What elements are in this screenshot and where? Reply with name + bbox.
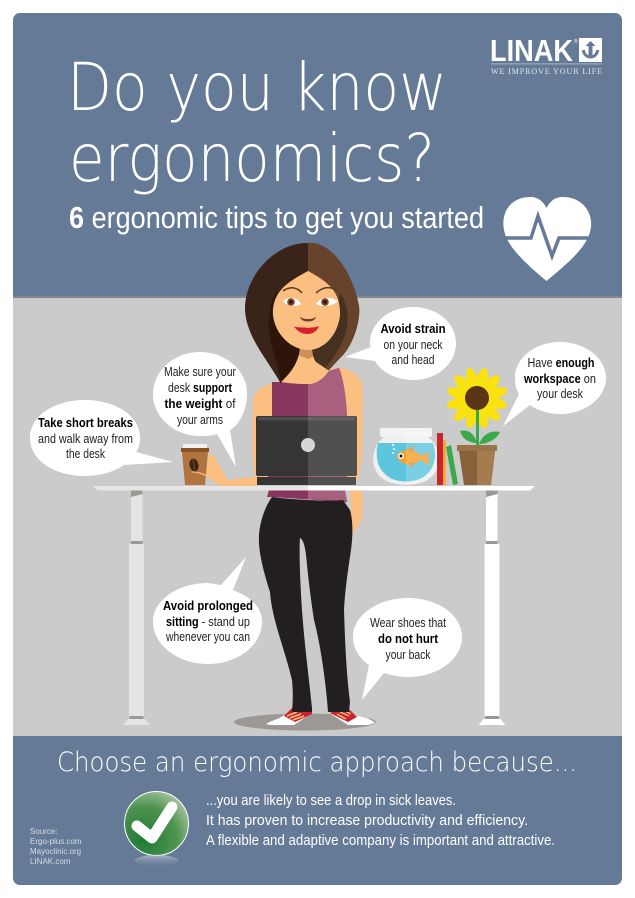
back arm (350, 490, 363, 535)
sunflower plant (446, 367, 508, 485)
logo: LINAK: WE IMPROVE YOUR LIFE (491, 67, 602, 76)
logo: LINAK: LINAK (490, 33, 574, 68)
speech bubble: support the weight: your arms (177, 413, 223, 427)
title: ergonomics? (69, 120, 435, 197)
nose (301, 318, 315, 321)
logo: LINAK (490, 33, 602, 76)
inner hair left (269, 290, 300, 382)
source list: Source: (30, 827, 58, 836)
arms and shoulders (252, 367, 363, 480)
speech bubble: avoid prolonged sitting (153, 557, 262, 664)
petals (446, 367, 508, 429)
speech bubble: shoes: Wear shoes that (370, 616, 446, 630)
speech bubble: enough workspace: workspace on (523, 372, 596, 386)
speech bubble: avoid prolonged sitting: sitting - stand up (166, 615, 250, 629)
source list: Ergo-plus.com (30, 837, 82, 846)
front arm and hand (193, 454, 257, 486)
hair back (245, 243, 359, 384)
speech bubble: shoes: your back (386, 648, 431, 662)
woman figure (193, 243, 376, 730)
face (273, 271, 340, 350)
logo: LINAK: ® (574, 38, 578, 45)
speech bubble: take short breaks: Take short breaks (38, 416, 133, 430)
speech bubble: support the weight: Make sure your (164, 365, 236, 379)
icon: green check (124, 792, 188, 868)
speech bubble: enough workspace (503, 342, 606, 426)
speech bubble: support the weight: desk support (168, 381, 233, 395)
reasons text: It has proven to increase productivity and efficiency. (206, 813, 528, 829)
eyes (283, 298, 338, 306)
speech bubble: avoid strain: on your neck (384, 338, 443, 352)
source list: Mayoclinic.org (30, 847, 81, 856)
speech bubble: avoid prolonged sitting: Avoid prolonged (163, 599, 253, 613)
speech bubble: enough workspace: Have enough (528, 356, 594, 370)
speech bubble: shoes (353, 598, 462, 700)
tank top (268, 368, 347, 480)
speech bubble: support the weight (153, 352, 247, 467)
reasons text (206, 793, 555, 849)
speech bubble: avoid strain (345, 307, 456, 380)
neck shade (296, 347, 320, 359)
source list (30, 827, 82, 866)
coffee cup (181, 444, 212, 485)
right desk leg (478, 490, 506, 725)
neck and chest (281, 340, 329, 384)
icon: heart with pulse (500, 197, 594, 281)
speech bubble: take short breaks: and walk away from (38, 432, 133, 446)
reasons text: ...you are likely to see a drop in sick leaves. (206, 793, 456, 809)
subtitle: 6 ergonomic tips to get you started (69, 200, 484, 235)
goldfish (396, 446, 430, 468)
bottom heading: Choose an ergonomic approach because... (57, 747, 577, 778)
speech bubble: enough workspace: your desk (537, 387, 584, 401)
eyebrows (283, 288, 338, 293)
source list: LINAK.com (30, 857, 71, 866)
laptop (256, 416, 357, 485)
speech bubble: avoid prolonged sitting: whenever you can (165, 630, 250, 644)
lips (294, 326, 319, 334)
title (67, 49, 447, 197)
reasons text: A flexible and adaptive company is important and attractive. (206, 833, 555, 849)
inner hair right (312, 293, 348, 368)
left desk leg (123, 490, 150, 725)
shoes (266, 708, 375, 725)
top below desk (267, 490, 347, 502)
desktop (93, 486, 535, 490)
books (437, 433, 458, 485)
fishbowl (373, 428, 439, 485)
speech bubble: shoes: do not hurt (378, 632, 439, 646)
speech bubble: avoid strain: Avoid strain (380, 322, 446, 336)
desk legs (123, 490, 506, 725)
trousers (259, 497, 352, 712)
title: Do you know (67, 49, 447, 126)
speech bubble: take short breaks (30, 400, 173, 476)
floor shadow (234, 714, 376, 730)
speech bubble: take short breaks: the desk (66, 447, 106, 461)
speech bubble: support the weight: the weight of (164, 397, 236, 411)
speech bubble: avoid strain: and head (392, 353, 435, 367)
